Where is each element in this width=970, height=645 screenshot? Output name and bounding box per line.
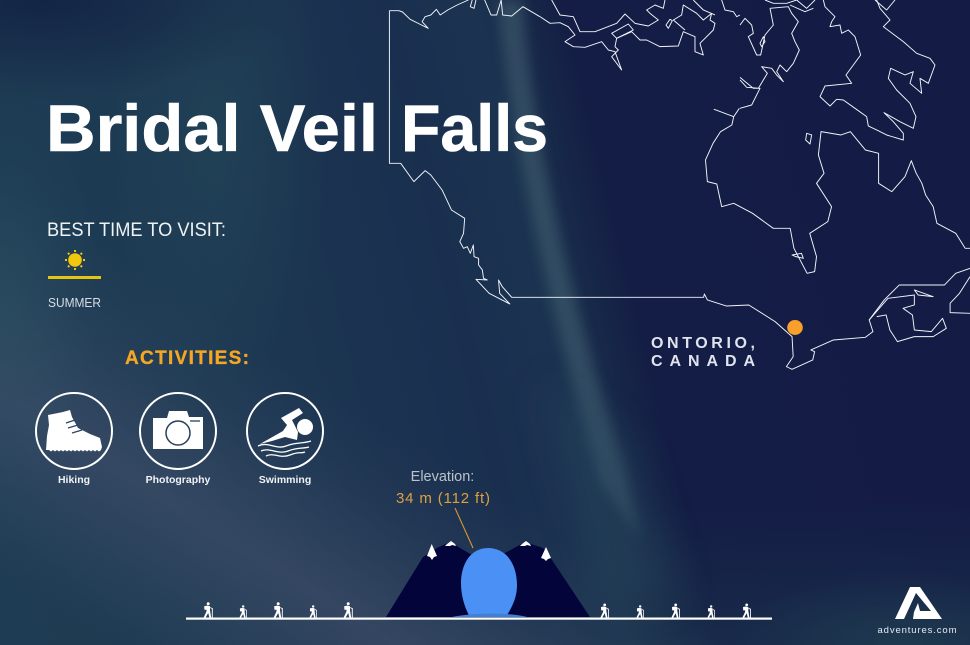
elevation arrow [455,508,473,548]
activity: swimming [247,393,323,486]
icon: logo mark [895,587,942,619]
activity: hiking: Hiking [58,474,90,486]
location marker [787,320,803,335]
icon: swimmer [258,408,313,456]
label: summer: SUMMER [48,296,101,310]
best time to visit [47,220,226,310]
eastern arctic and Baffin [740,0,935,144]
mountains [386,542,590,617]
hikers left [204,602,352,618]
west and south coast, Hudson Bay [389,0,970,369]
central arctic coast [540,0,740,70]
season bar [48,276,101,279]
location label: CANADA [651,353,755,370]
activity: swimming: Swimming [259,474,311,486]
location label [651,335,755,370]
title: Falls [401,91,548,165]
title [46,91,548,165]
map of Canada outline [389,0,970,369]
pool [452,614,527,617]
elevation label: 34 m (112 ft) [396,490,490,507]
activities heading: ACTIVITIES: [125,348,249,369]
icon: camera [153,411,203,449]
snow caps [427,541,551,561]
logo: adventures.com [878,625,957,636]
waterfall [461,548,517,617]
icon: sun [65,250,85,270]
ground line [186,618,772,620]
aurora bands [497,0,680,600]
activity: photography [140,393,216,486]
elevation label: Elevation: [411,469,474,485]
logo [878,587,957,636]
title: Bridal Veil [46,91,378,165]
activity: hiking [36,393,112,486]
activity: photography: Photography [146,474,211,486]
hikers right [600,603,750,618]
elevation label [396,469,490,507]
waterfall and mountains [386,541,590,617]
heading: best time to visit: BEST TIME TO VISIT: [47,220,226,241]
icon: hiking boot [46,410,102,452]
location label: ONTORIO, [651,335,755,352]
